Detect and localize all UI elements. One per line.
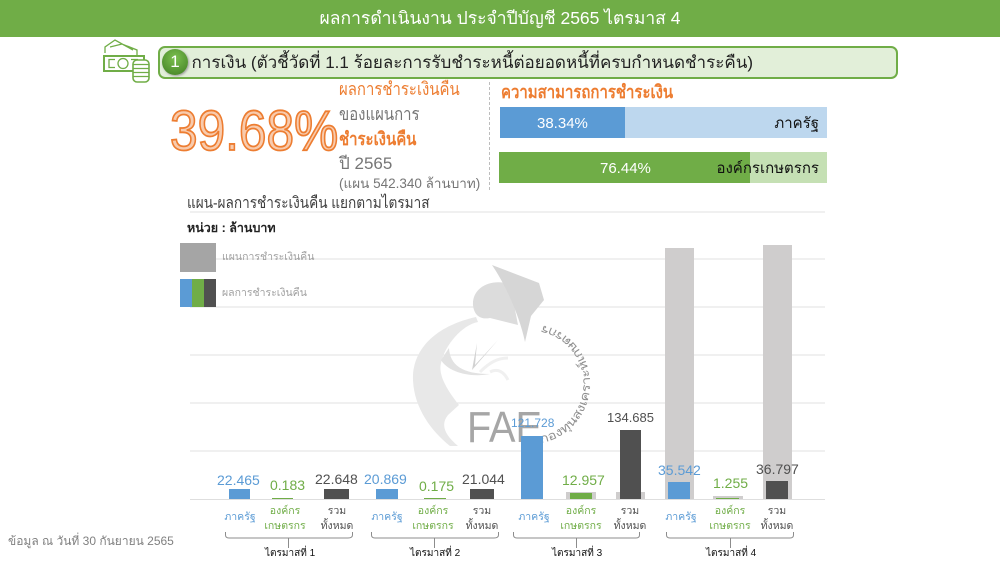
category labels: ภาครัฐ bbox=[371, 511, 403, 523]
value labels: 0.175 bbox=[419, 478, 454, 494]
value labels: 121.728 bbox=[511, 416, 554, 430]
legend: plan: แผนการชำระเงินคืน bbox=[222, 251, 314, 263]
value labels: 22.648 bbox=[315, 471, 358, 487]
watermark logo bbox=[413, 265, 590, 452]
category labels: องค์กร bbox=[566, 505, 596, 517]
data date note: ข้อมูล ณ วันที่ 30 กันยายน 2565 bbox=[8, 534, 174, 548]
result bars bbox=[229, 430, 788, 499]
dashed divider bbox=[489, 82, 490, 190]
category labels: ทั้งหมด bbox=[321, 520, 353, 532]
category labels bbox=[224, 504, 793, 532]
section title: การเงิน (ตัวชี้วัดที่ 1.1 ร้อยละการรับชำระหนี้ต่อยอดหนี้ที่ครบกำหนดชำระคืน) bbox=[192, 53, 753, 72]
quarter labels bbox=[264, 546, 756, 559]
watermark logo: กองทุนสงเคราะห์เกษตรกร bbox=[541, 326, 590, 442]
category labels: รวม bbox=[328, 505, 346, 517]
quarter labels: ไตรมาสที่ 1 bbox=[265, 548, 315, 559]
repayment text block: ชำระเงินคืน bbox=[339, 129, 416, 149]
big percentage: 39.68% bbox=[170, 99, 338, 163]
ability heading: ความสามารถการชำระเงิน bbox=[501, 82, 673, 102]
repayment text block bbox=[338, 79, 480, 191]
bar: government sector bbox=[500, 107, 827, 138]
value labels: 35.542 bbox=[658, 462, 701, 478]
category labels: ทั้งหมด bbox=[466, 520, 498, 532]
repayment text block: (แผน 542.340 ล้านบาท) bbox=[339, 176, 480, 191]
category labels: ภาครัฐ bbox=[665, 511, 697, 523]
value labels: 36.797 bbox=[756, 461, 799, 477]
header title: ผลการดำเนินงาน ประจำปีบัญชี 2565 ไตรมาส 4 bbox=[320, 8, 680, 28]
bar: agricultural organization bbox=[499, 152, 827, 183]
bar: agricultural organization: 76.44% bbox=[600, 160, 651, 177]
icon: money and coins bbox=[104, 40, 149, 82]
repayment text block: ของแผนการ bbox=[339, 104, 420, 124]
bar: government sector: 38.34% bbox=[537, 115, 588, 132]
category labels: ภาครัฐ bbox=[224, 511, 256, 523]
category labels: รวม bbox=[473, 505, 491, 517]
legend: result: ผลการชำระเงินคืน bbox=[222, 287, 307, 299]
quarter brackets bbox=[226, 532, 794, 548]
category labels: องค์กร bbox=[715, 505, 745, 517]
value labels: 20.869 bbox=[364, 471, 407, 487]
badge number 1 bbox=[162, 49, 188, 75]
value labels: 12.957 bbox=[562, 472, 605, 488]
quarter labels: ไตรมาสที่ 4 bbox=[706, 548, 756, 559]
repayment text block: ผลการชำระเงินคืน bbox=[339, 79, 460, 99]
repayment text block: ปี 2565 bbox=[339, 154, 392, 173]
bar: government sector: ภาครัฐ bbox=[774, 115, 819, 132]
chart title: แผน-ผลการชำระเงินคืน แยกตามไตรมาส bbox=[187, 195, 430, 212]
category labels: รวม bbox=[621, 505, 639, 517]
category labels: ทั้งหมด bbox=[761, 520, 793, 532]
category labels: เกษตรกร bbox=[264, 520, 306, 532]
category labels: เกษตรกร bbox=[560, 520, 602, 532]
plan bars bbox=[566, 245, 792, 499]
quarter labels: ไตรมาสที่ 2 bbox=[410, 548, 460, 559]
legend: result bbox=[180, 279, 307, 307]
value labels: 21.044 bbox=[462, 471, 505, 487]
bar: agricultural organization: องค์กรเกษตรกร bbox=[716, 160, 819, 177]
category labels: เกษตรกร bbox=[709, 520, 751, 532]
header bar bbox=[0, 0, 1000, 37]
watermark logo: FAE bbox=[467, 403, 542, 452]
badge number 1: 1 bbox=[170, 52, 180, 71]
value labels: 1.255 bbox=[713, 475, 748, 491]
category labels: องค์กร bbox=[418, 505, 448, 517]
category labels: เกษตรกร bbox=[412, 520, 454, 532]
legend: plan bbox=[180, 243, 314, 272]
value labels bbox=[217, 410, 799, 494]
value labels: 134.685 bbox=[607, 410, 654, 425]
category labels: องค์กร bbox=[270, 505, 300, 517]
quarter labels: ไตรมาสที่ 3 bbox=[552, 548, 602, 559]
category labels: ทั้งหมด bbox=[614, 520, 646, 532]
value labels: 22.465 bbox=[217, 472, 260, 488]
unit label: หน่วย : ล้านบาท bbox=[187, 221, 276, 235]
category labels: รวม bbox=[768, 505, 786, 517]
section banner bbox=[158, 46, 898, 79]
value labels: 0.183 bbox=[270, 477, 305, 493]
category labels: ภาครัฐ bbox=[518, 511, 550, 523]
